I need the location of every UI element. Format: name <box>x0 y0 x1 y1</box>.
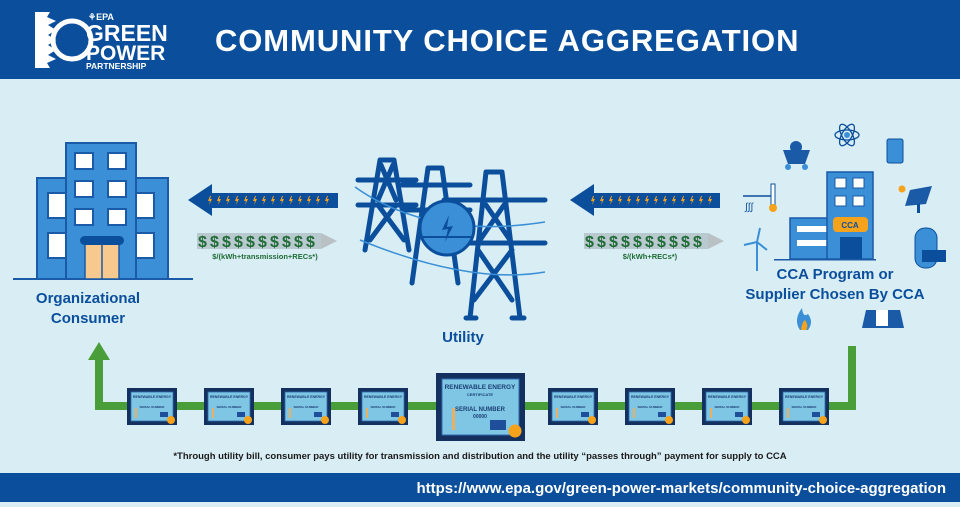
REC certificates <box>127 373 829 441</box>
utility towers <box>358 160 545 318</box>
label: CCA Program: CCA Program or <box>777 266 894 283</box>
large certificate: SERIAL NUMBER <box>455 407 506 413</box>
green REC path arrow <box>88 342 856 410</box>
icons: energy sources: ∫∫∫ <box>744 202 754 213</box>
label: CCA Program: Supplier Chosen By CCA <box>745 286 925 303</box>
icons: energy sources <box>743 122 946 330</box>
arrow: energy from CCA to utility <box>570 184 720 216</box>
label: CCA Program <box>745 266 925 303</box>
logo: PARTNERSHIP <box>86 61 147 71</box>
label: Organizational Consumer <box>36 290 140 327</box>
title: COMMUNITY CHOICE AGGREGATION <box>215 23 799 58</box>
large certificate: CERTIFICATE <box>467 392 493 397</box>
logo: GREEN <box>86 20 168 46</box>
CCA building <box>774 172 876 260</box>
payment: utility to CCA: $/(kWh+RECs*) <box>623 252 678 261</box>
icon: meter <box>420 201 474 255</box>
logo <box>35 12 168 71</box>
large certificate <box>436 373 525 441</box>
label: Organizational Consumer: Consumer <box>51 310 125 327</box>
building: organizational consumer <box>13 143 193 280</box>
large certificate: RENEWABLE ENERGY <box>445 384 516 391</box>
header bar <box>0 0 960 79</box>
payment: consumer to utility: $/(kWh+transmission+RECs*) <box>212 252 318 261</box>
arrow: energy to consumer <box>188 184 338 216</box>
footer bar: https://www.epa.gov/green-power-markets/community-choice-aggregation <box>416 480 946 497</box>
logo: ⚘EPA <box>88 12 114 22</box>
logo: POWER <box>86 42 165 65</box>
payment: consumer to utility <box>197 233 337 261</box>
label: Utility: Utility <box>442 329 484 346</box>
payment: utility to CCA <box>584 233 724 261</box>
label: Organizational Consumer: Organizational <box>36 290 140 307</box>
CCA building: CCA <box>841 221 859 230</box>
footer bar <box>0 473 960 502</box>
large certificate: 00000 <box>473 414 487 420</box>
footnote: *Through utility bill, consumer pays utility for transmission and distribution and the utility “passes through” payment for supply to CCA <box>173 451 787 462</box>
